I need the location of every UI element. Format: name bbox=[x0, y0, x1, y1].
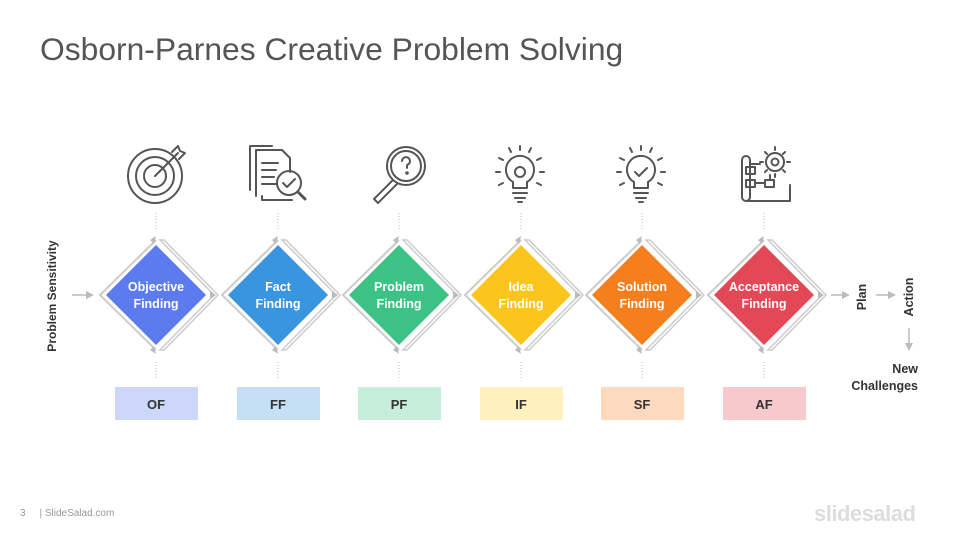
footer: page number: 3 | SlideSalad.com bbox=[20, 508, 114, 519]
step: idea finding: Idea bbox=[508, 280, 535, 294]
step: fact finding: Fact bbox=[265, 280, 292, 294]
icon: light bulb check bbox=[617, 146, 665, 202]
title: Osborn-Parnes Creative Problem Solving bbox=[40, 31, 623, 67]
step: idea finding: Finding bbox=[498, 297, 544, 311]
footer: logo: slidesalad bbox=[814, 501, 915, 526]
step: problem finding: PF bbox=[391, 397, 407, 412]
step: objective finding: Objective bbox=[128, 280, 184, 294]
step: acceptance finding bbox=[708, 213, 826, 420]
icon: light bulb idea bbox=[496, 146, 544, 202]
step: acceptance finding: Acceptance bbox=[729, 280, 799, 294]
step: problem finding: Problem bbox=[374, 280, 424, 294]
step: problem finding bbox=[343, 213, 461, 420]
step: objective finding bbox=[100, 213, 218, 420]
step: problem finding: Finding bbox=[376, 297, 422, 311]
step: solution finding: Finding bbox=[619, 297, 665, 311]
step: fact finding: Finding bbox=[255, 297, 301, 311]
outcome: plan action new challenges: Action bbox=[902, 278, 916, 316]
step: fact finding bbox=[222, 213, 340, 420]
icon: blueprint gear bbox=[742, 147, 790, 201]
icon: target bbox=[128, 146, 185, 203]
outcome: plan action new challenges: Challenges bbox=[851, 379, 918, 393]
outcome: plan action new challenges: Plan bbox=[855, 284, 869, 310]
step: solution finding bbox=[586, 213, 704, 420]
outcome: plan action new challenges bbox=[831, 278, 918, 393]
step: objective finding: Finding bbox=[133, 297, 179, 311]
step: idea finding: IF bbox=[515, 397, 527, 412]
arrow: entry bbox=[72, 294, 92, 296]
step: solution finding: SF bbox=[634, 397, 650, 412]
icon: magnifier question bbox=[374, 147, 425, 203]
step: solution finding: Solution bbox=[617, 280, 667, 294]
outcome: plan action new challenges: New bbox=[892, 362, 918, 376]
icon: document with magnifier bbox=[250, 146, 305, 200]
step: acceptance finding: AF bbox=[755, 397, 773, 412]
label: problem sensitivity: Problem Sensitivity bbox=[45, 240, 59, 352]
step: idea finding bbox=[465, 213, 583, 420]
step: acceptance finding: Finding bbox=[741, 297, 787, 311]
step: fact finding: FF bbox=[270, 397, 286, 412]
step: objective finding: OF bbox=[147, 397, 165, 412]
